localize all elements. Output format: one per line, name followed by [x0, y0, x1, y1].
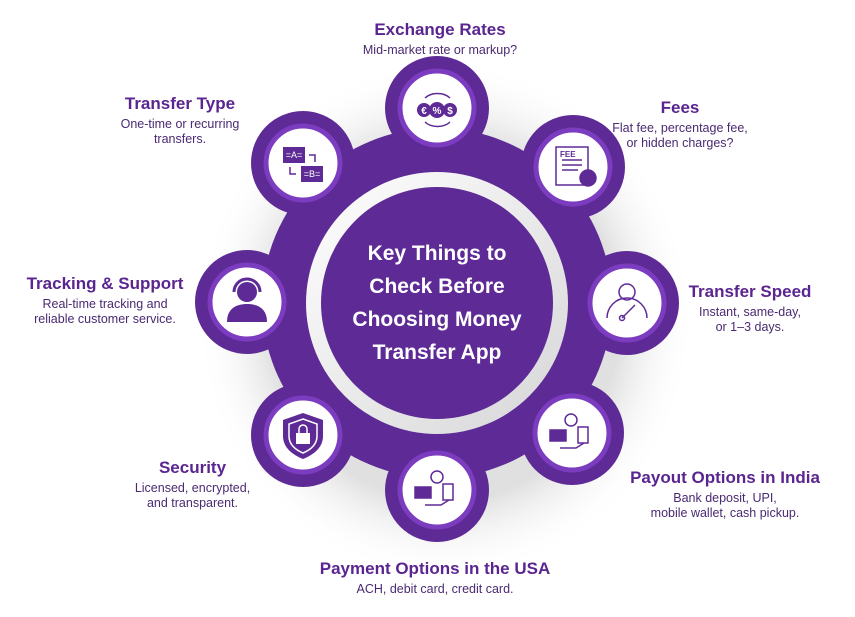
- text: payout india: Bank deposit, UPI,: [673, 491, 777, 505]
- text: transfer type: Transfer Type: [125, 94, 235, 113]
- text: payout india: Payout Options in India: [630, 468, 820, 487]
- text: tracking: reliable customer service.: [34, 312, 176, 326]
- icon: transfer type: =A=: [286, 150, 302, 160]
- icon: transfer type: =B=: [304, 169, 320, 179]
- center title: Key Things to: [368, 242, 506, 265]
- icon: fees: FEE: [560, 150, 576, 159]
- icon: transfer type: [283, 147, 323, 182]
- icon: exchange: [417, 93, 457, 127]
- text: payment usa: Payment Options in the USA: [320, 559, 550, 578]
- icon: exchange: $: [447, 106, 453, 117]
- center circle: [306, 172, 568, 434]
- icon: speed: [607, 284, 647, 320]
- icon: support: [227, 279, 267, 322]
- text: tracking: [26, 274, 184, 326]
- text: security: [135, 458, 250, 510]
- text: fees: Flat fee, percentage fee,: [612, 121, 748, 135]
- icon: payment usa: [415, 471, 453, 505]
- text: tracking: Tracking & Support: [27, 274, 183, 293]
- text: fees: Fees: [661, 98, 699, 117]
- text: tracking: Real-time tracking and: [42, 297, 168, 311]
- text: security: Security: [159, 458, 226, 477]
- text: security: Licensed, encrypted,: [135, 481, 250, 495]
- text: payout india: [630, 468, 820, 520]
- text: transfer speed: Instant, same-day,: [699, 305, 801, 319]
- text: transfer speed: or 1–3 days.: [716, 320, 784, 334]
- text: transfer speed: Transfer Speed: [689, 282, 811, 301]
- text: exchange rates: [363, 20, 517, 57]
- icon: exchange: %: [433, 106, 442, 117]
- text: transfer type: [121, 94, 239, 146]
- center title: Transfer App: [373, 341, 501, 364]
- gear body: [195, 56, 679, 542]
- text: exchange rates: Exchange Rates: [374, 20, 506, 39]
- text: exchange rates: Mid-market rate or markup?: [363, 43, 517, 57]
- text: transfer type: One-time or recurring: [121, 117, 239, 131]
- icon: exchange: €: [421, 106, 427, 117]
- text: transfer type: transfers.: [154, 132, 206, 146]
- icon: fees: [556, 147, 596, 186]
- text: fees: or hidden charges?: [626, 136, 734, 150]
- text: payment usa: [320, 559, 550, 596]
- text: payment usa: ACH, debit card, credit card.: [356, 582, 514, 596]
- text: payout india: mobile wallet, cash pickup.: [651, 506, 799, 520]
- center title: Check Before: [369, 275, 505, 298]
- icon: payout india: [550, 414, 588, 448]
- icon: shield: [283, 413, 323, 459]
- text: fees: [612, 98, 748, 150]
- text: security: and transparent.: [147, 496, 238, 510]
- center title: Choosing Money: [352, 308, 522, 331]
- text: transfer speed: [688, 282, 811, 334]
- icon circles: [210, 71, 664, 527]
- center title: [352, 242, 522, 364]
